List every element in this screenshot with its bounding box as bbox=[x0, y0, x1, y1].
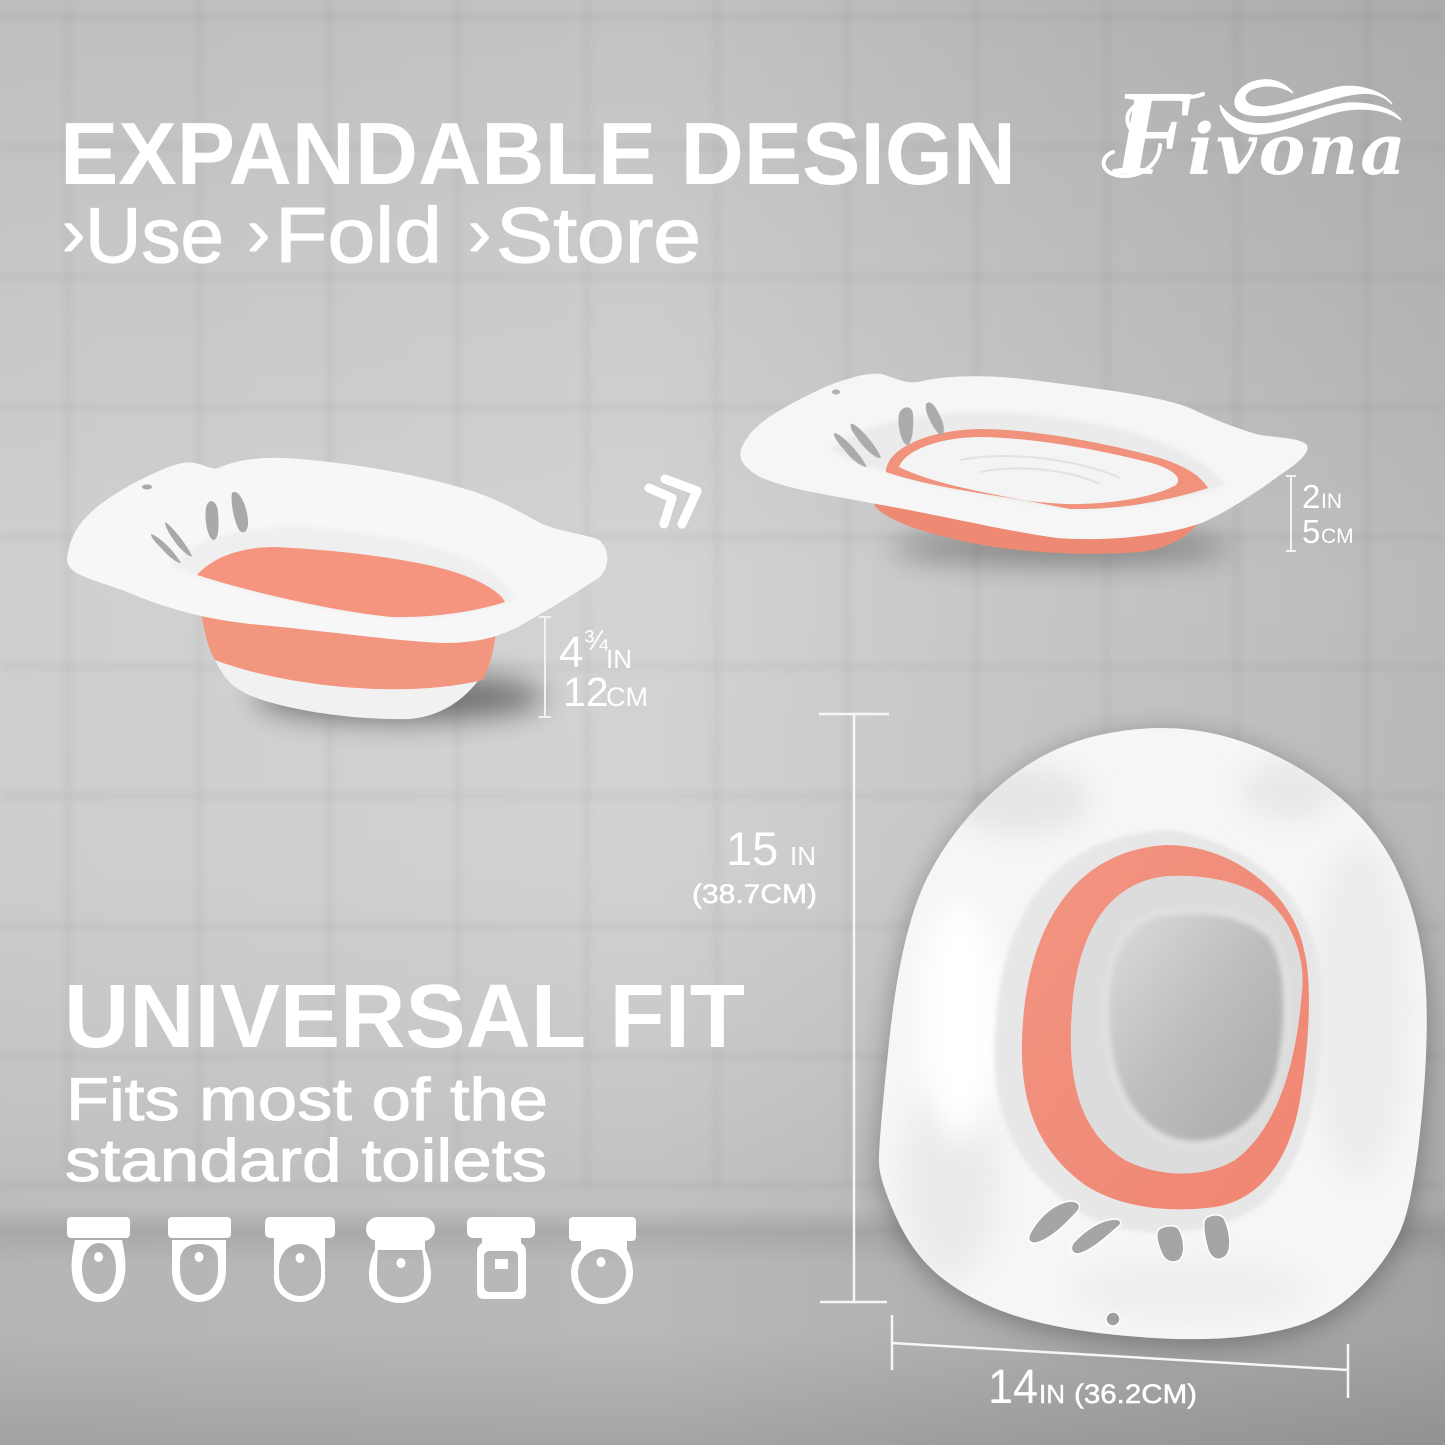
dimension: 2 in 5 cm: CM bbox=[1321, 525, 1354, 548]
product: expanded bidet bbox=[67, 458, 607, 721]
rim soft shading bbox=[900, 760, 1410, 1320]
text: fits most of the standard toilets: Fits most of the bbox=[66, 1066, 548, 1133]
dimension: 2 in 5 cm bbox=[1286, 476, 1354, 551]
dimension: 14 in width: (36.2CM) bbox=[1074, 1379, 1197, 1409]
shadow under expanded bidet bbox=[255, 673, 545, 721]
product: top view bidet bbox=[879, 728, 1427, 1345]
dimension: 2 in 5 cm: 2 bbox=[1302, 478, 1320, 515]
rim bbox=[740, 374, 1308, 539]
icon: toilet 6 bbox=[569, 1217, 636, 1304]
title: expandable design: EXPANDABLE DESIGN bbox=[60, 104, 1016, 203]
hanging hole bbox=[1106, 1312, 1120, 1326]
dimension: 4 3/4 in 12 cm: 4 bbox=[559, 628, 583, 677]
subtitle: use fold store: › bbox=[62, 193, 85, 271]
arrow: double chevron bbox=[649, 479, 697, 524]
subtitle: use fold store: Store bbox=[496, 191, 701, 279]
subtitle: use fold store: › bbox=[247, 193, 270, 271]
icon: toilet 5 bbox=[467, 1217, 535, 1299]
dimension: 14 in width bbox=[892, 1315, 1348, 1414]
drainage slots bbox=[1029, 1201, 1230, 1262]
basin floor bbox=[1106, 911, 1287, 1144]
heading: universal fit: UNIVERSAL FIT bbox=[64, 967, 745, 1067]
shadow around top view bidet bbox=[879, 734, 1427, 1345]
salmon bowl interior bbox=[197, 547, 505, 617]
drainage slots bbox=[834, 402, 944, 467]
salmon collapsible band bbox=[201, 612, 496, 689]
subtitle: use fold store: › bbox=[468, 193, 491, 271]
text: fits most of the standard toilets: standard toilets bbox=[65, 1127, 547, 1194]
folded basin interior bbox=[899, 437, 1178, 504]
drainage slots bbox=[151, 492, 248, 563]
subtitle: use fold store: Use bbox=[85, 191, 224, 279]
dimension: 4 3/4 in 12 cm: 12 bbox=[563, 669, 609, 715]
dimension: 15 in height: (38.7CM) bbox=[692, 879, 817, 909]
shadow under folded bidet bbox=[890, 532, 1230, 564]
subtitle: use fold store: Fold bbox=[275, 191, 442, 279]
dimension: 15 in height bbox=[692, 714, 889, 1302]
stepped inner wall bbox=[1071, 876, 1302, 1174]
icons: six toilet shapes bbox=[67, 1217, 636, 1304]
salmon ring bbox=[886, 429, 1208, 509]
lip around basin bbox=[995, 830, 1322, 1233]
dimension: 2 in 5 cm: IN bbox=[1321, 490, 1342, 513]
icon: toilet 3 bbox=[265, 1217, 335, 1302]
dimension: 4 3/4 in 12 cm: ¾ bbox=[584, 625, 609, 657]
dimension: 14 in width: 14 bbox=[988, 1361, 1038, 1414]
product: folded bidet bbox=[740, 374, 1308, 564]
dimension: 15 in height: IN bbox=[790, 841, 816, 871]
dimension: 2 in 5 cm: 5 bbox=[1302, 513, 1320, 550]
icon: toilet 4 bbox=[366, 1217, 435, 1303]
bowl base bbox=[213, 655, 484, 719]
dimension: 4 3/4 in 12 cm bbox=[539, 617, 648, 717]
dimension: 14 in width: IN bbox=[1039, 1379, 1065, 1409]
text: fits most of the standard toilets bbox=[65, 1066, 548, 1194]
dimension: 4 3/4 in 12 cm: CM bbox=[606, 682, 648, 712]
rim inner shading bbox=[170, 527, 515, 618]
dimension: 15 in height: 15 bbox=[726, 822, 778, 875]
rim bbox=[67, 458, 607, 643]
logo: Fivona: Fivona bbox=[1111, 66, 1408, 201]
icon: toilet 2 bbox=[168, 1217, 231, 1302]
basin ripples bbox=[960, 456, 1120, 484]
icon: toilet 1 bbox=[67, 1217, 130, 1302]
salmon collapsible ring bbox=[1022, 845, 1309, 1209]
salmon base strip bbox=[874, 490, 1206, 554]
rim inner shading bbox=[830, 412, 1225, 509]
dimension: 4 3/4 in 12 cm: IN bbox=[606, 644, 632, 674]
rim body bbox=[879, 728, 1427, 1339]
subtitle: use fold store bbox=[62, 191, 701, 279]
